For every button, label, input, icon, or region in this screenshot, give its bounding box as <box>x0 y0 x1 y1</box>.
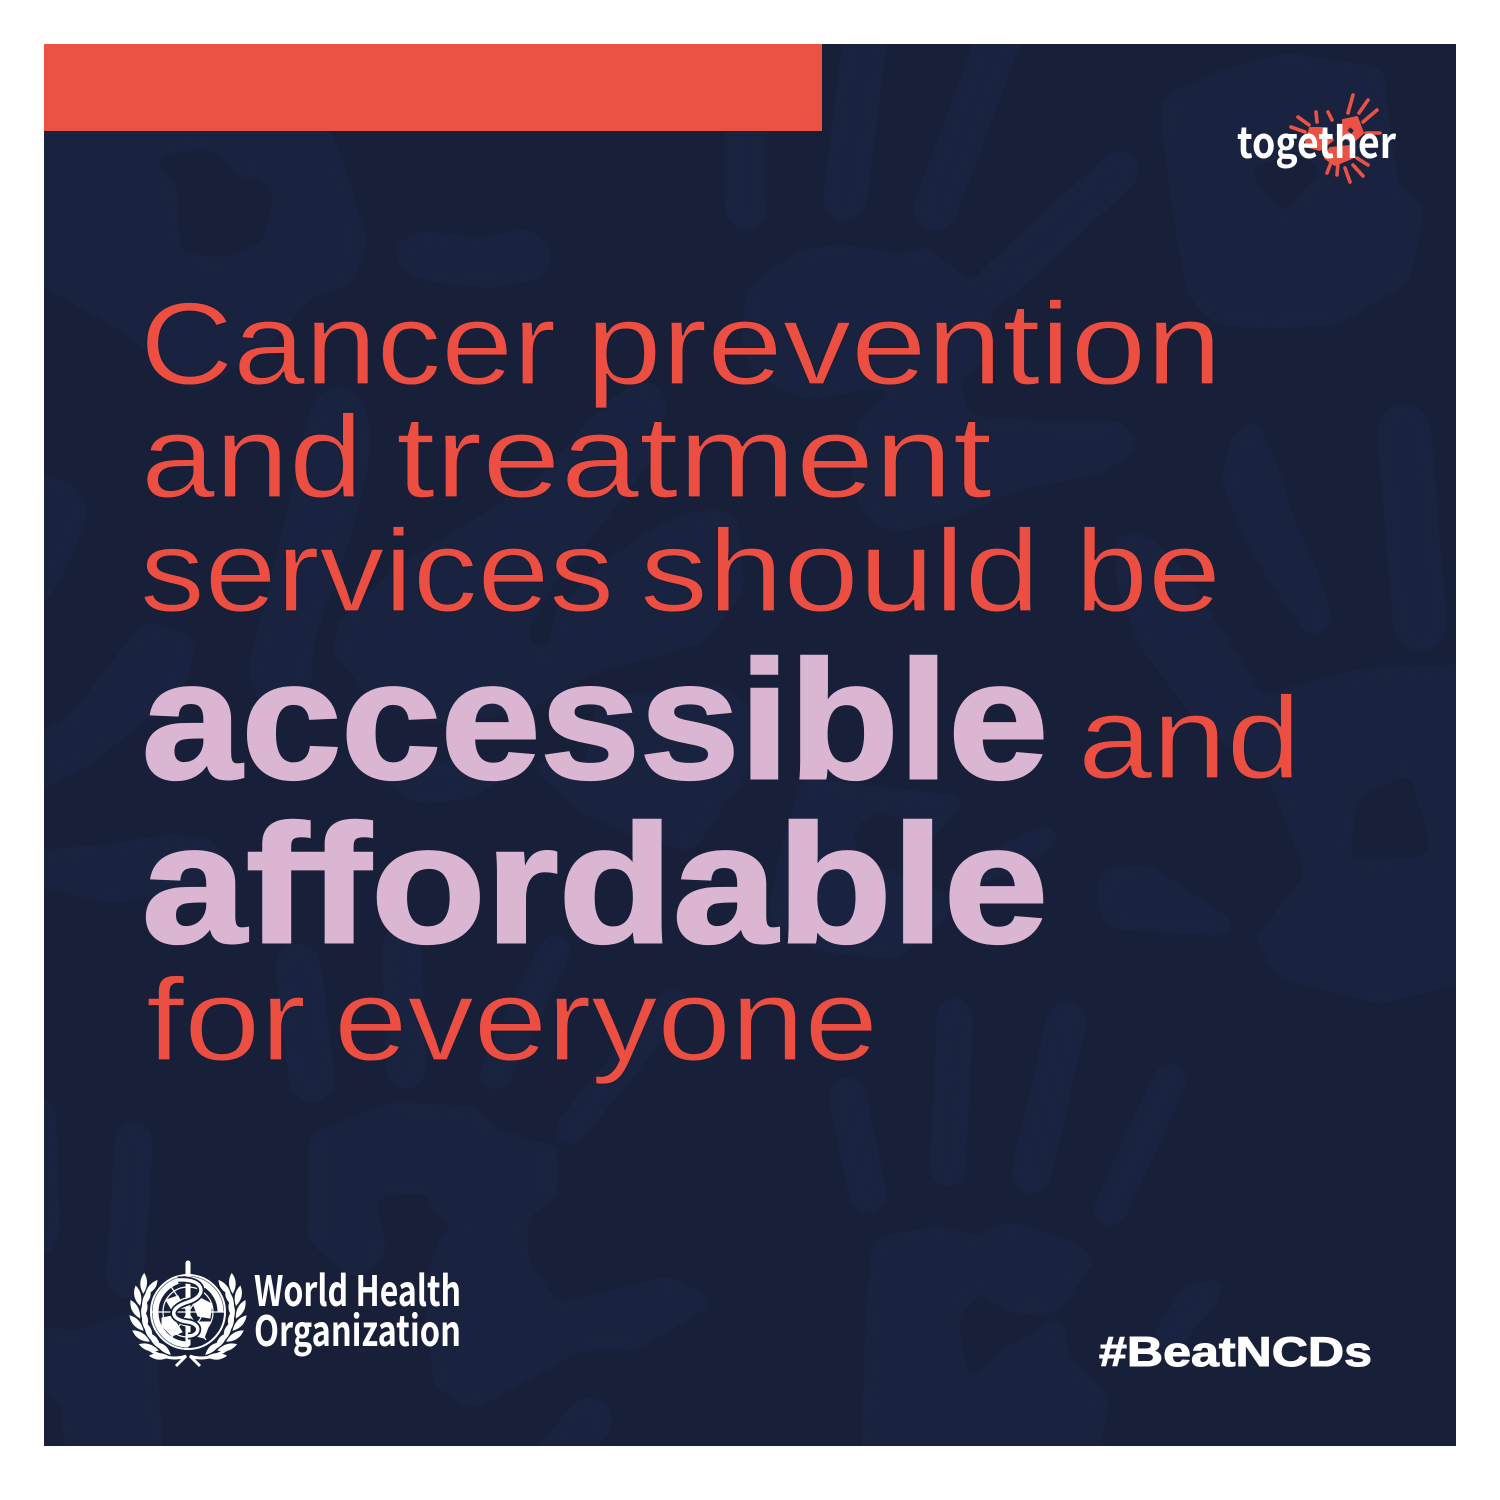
ribbon <box>150 1350 226 1366</box>
left laurel <box>129 1273 174 1365</box>
staff and serpent <box>174 1263 201 1344</box>
logo: together with handprints <box>1237 95 1396 182</box>
headline line 6: for everyone: everyone <box>334 954 878 1085</box>
headline line 1 <box>140 278 1222 409</box>
headline line 2: treatment <box>396 391 992 522</box>
headline line 6: for everyone <box>146 954 878 1085</box>
headline line 4: accessible and: accessible <box>142 626 1048 814</box>
headline line 6: for everyone: for <box>146 954 306 1085</box>
headline line 3: services <box>140 505 614 636</box>
icon: red handprints <box>1291 95 1380 182</box>
World Health Organization wordmark: World Health <box>254 1258 461 1319</box>
together wordmark: together <box>1237 109 1396 171</box>
red header bar <box>44 44 822 131</box>
headline line 1: Cancer <box>140 278 556 409</box>
hashtag: #BeatNCDs <box>1099 1328 1372 1375</box>
right laurel <box>202 1273 247 1365</box>
headline line 2: and <box>141 391 363 522</box>
globe <box>151 1275 225 1349</box>
World Health Organization wordmark <box>254 1258 461 1359</box>
headline line 5: affordable: affordable <box>142 790 1048 978</box>
headline line 3 <box>140 505 1221 636</box>
headline line 3: should <box>640 505 1040 636</box>
headline line 3: be <box>1075 505 1221 636</box>
headline line 1: prevention <box>586 278 1222 409</box>
headline line 2 <box>141 391 992 522</box>
icon: WHO emblem <box>129 1263 247 1366</box>
logo: World Health Organization <box>129 1258 461 1366</box>
World Health Organization wordmark: Organization <box>254 1298 461 1359</box>
headline line 4: accessible and: and <box>1078 672 1301 803</box>
headline <box>140 278 1301 1085</box>
